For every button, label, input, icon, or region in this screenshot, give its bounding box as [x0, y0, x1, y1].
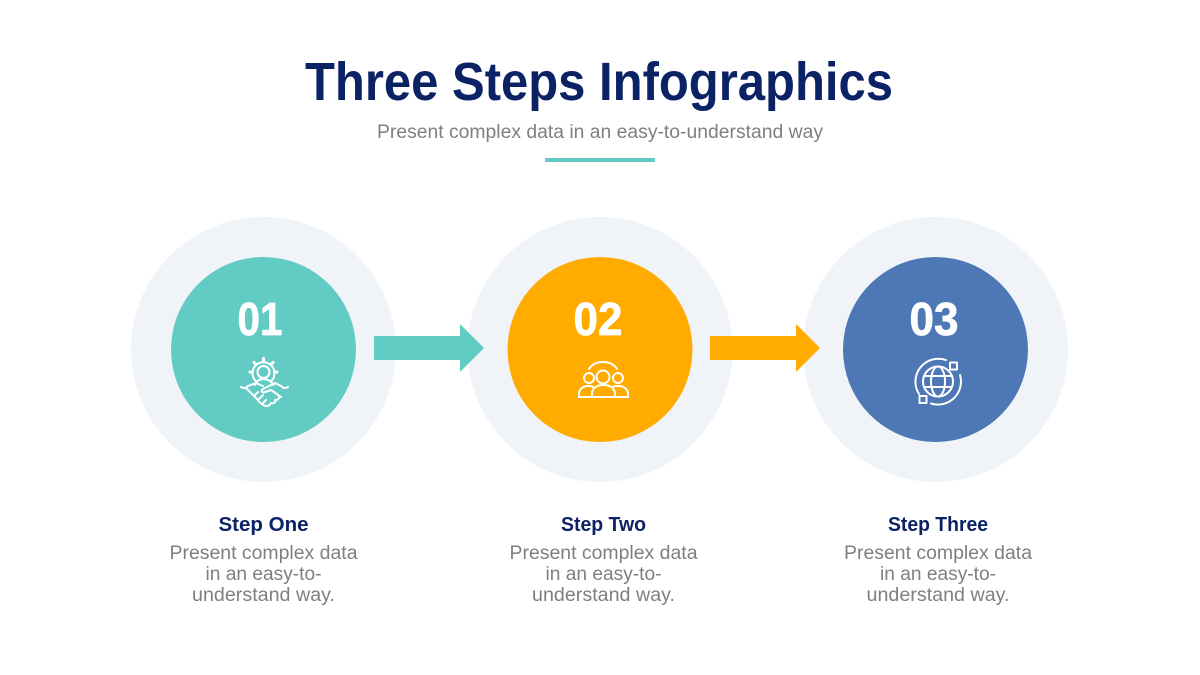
number 03: 03	[910, 293, 958, 345]
text block: step two: in an easy-to-	[546, 564, 662, 585]
text block: step two: understand way.	[532, 585, 675, 606]
text block: step two: Step Two	[561, 514, 646, 536]
text block: step one	[170, 514, 358, 606]
icon: group of people	[579, 362, 628, 397]
panel: step three circle	[803, 217, 1068, 482]
text block: step one: Step One	[218, 514, 308, 536]
arrow: step one to two	[374, 324, 484, 372]
text block: step one: in an easy-to-	[206, 564, 322, 585]
text block: step one: understand way.	[192, 585, 335, 606]
text block: step three: Step Three	[888, 514, 988, 536]
text block: step two: Present complex data	[510, 543, 698, 564]
arrow: step two to three	[710, 324, 820, 372]
text block: step one: Present complex data	[170, 543, 358, 564]
icon: handshake with gear	[241, 358, 288, 406]
icon: globe with orbit	[915, 359, 961, 405]
title underline	[545, 158, 655, 162]
text block: step three: understand way.	[866, 585, 1010, 606]
text block: step three: in an easy-to-	[880, 564, 996, 585]
text block: step three: Present complex data	[844, 543, 1032, 564]
text block: step three	[844, 514, 1032, 606]
subtitle: Present complex data in an easy-to-understand way	[377, 122, 823, 143]
panel: step two circle	[468, 217, 732, 482]
title: Three Steps Infographics	[305, 52, 893, 112]
number 01: 01	[238, 293, 282, 345]
text block: step two	[510, 514, 698, 606]
number 02: 02	[574, 293, 622, 345]
panel: step one circle	[131, 217, 396, 482]
